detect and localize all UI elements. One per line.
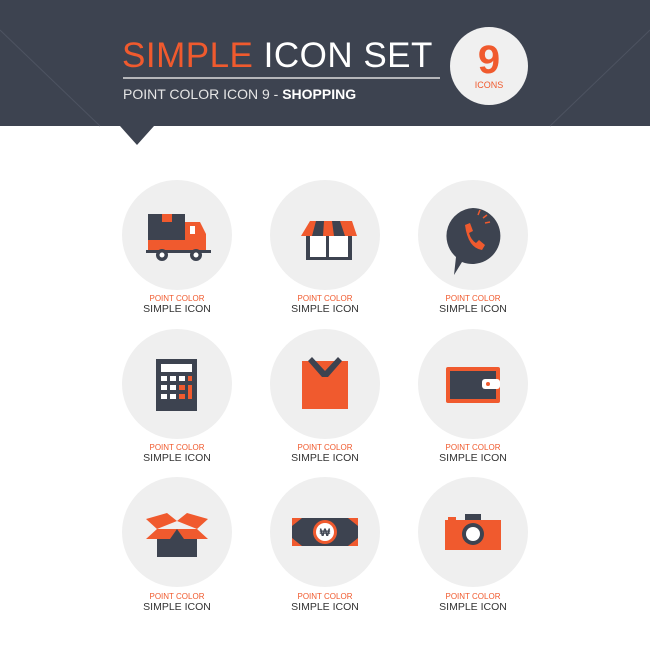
icon: shirt [270, 329, 380, 439]
icon: wallet [418, 329, 528, 439]
badge: 9 icons [450, 27, 528, 105]
text: POINT COLOR [446, 443, 500, 452]
text: POINT COLOR [446, 592, 500, 601]
text: POINT COLOR [298, 294, 352, 303]
title: SIMPLE ICON SET [122, 36, 433, 75]
icon: phone bubble [418, 180, 528, 290]
text: POINT COLOR [298, 443, 352, 452]
text: SIMPLE ICON [291, 303, 359, 315]
text: SIMPLE ICON [291, 452, 359, 464]
badge: 9 icons: ICONS [475, 80, 503, 90]
subtitle: POINT COLOR ICON 9 - SHOPPING [123, 86, 356, 102]
text: SIMPLE ICON [439, 601, 507, 613]
text: SIMPLE ICON [439, 303, 507, 315]
icon: money: ₩ [320, 527, 331, 539]
icon: calculator [122, 329, 232, 439]
icon: truck [122, 180, 232, 290]
text: SIMPLE ICON [143, 452, 211, 464]
text: SIMPLE ICON [291, 601, 359, 613]
labels: SIMPLE ICON [143, 303, 211, 315]
text: SIMPLE ICON [143, 601, 211, 613]
text: SIMPLE ICON [439, 452, 507, 464]
labels: POINT COLOR [150, 294, 204, 303]
badge: 9 icons: 9 [478, 38, 500, 82]
icon: camera [418, 477, 528, 587]
text: POINT COLOR [150, 443, 204, 452]
icon: shop [270, 180, 380, 290]
icon: box [122, 477, 232, 587]
icon: money [270, 477, 380, 587]
text: POINT COLOR [446, 294, 500, 303]
text: POINT COLOR [298, 592, 352, 601]
labels [143, 294, 211, 315]
text: POINT COLOR [150, 592, 204, 601]
header banner [0, 0, 650, 145]
